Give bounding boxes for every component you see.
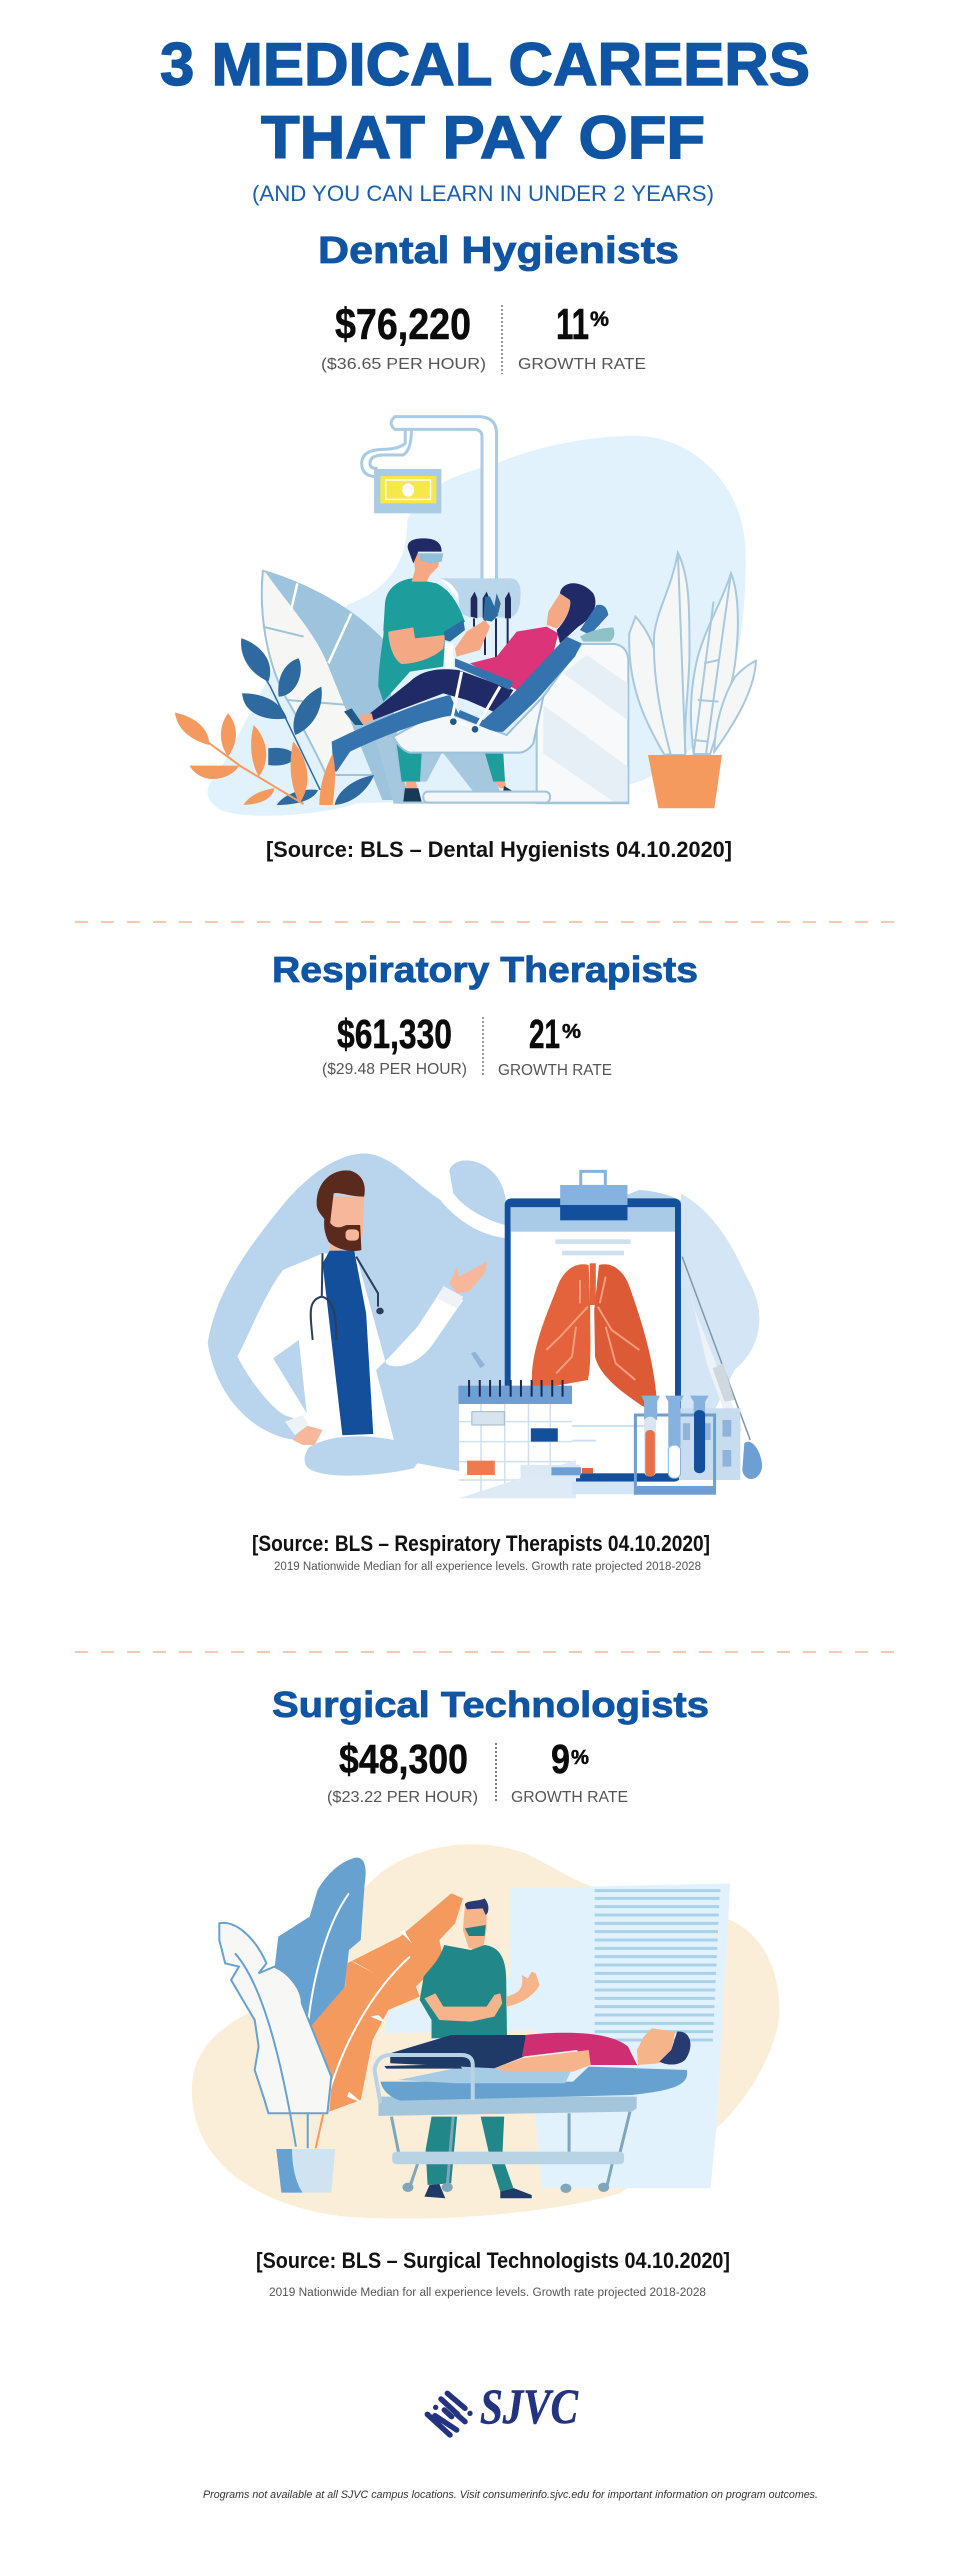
- growth: dental: [518, 300, 646, 373]
- growth: dental: %: [590, 308, 609, 331]
- pill: [471, 1352, 485, 1368]
- white strip: [445, 643, 453, 668]
- background blob: [192, 1844, 779, 2219]
- title: 3 MEDICAL CAREERS: [160, 31, 810, 98]
- base plate: [393, 792, 628, 803]
- patient face and hair: [547, 583, 595, 643]
- coat: [237, 1253, 463, 1452]
- lamp monitor: [374, 469, 441, 513]
- dental scene: [332, 538, 628, 803]
- illustration: surgical technologist with patient: [192, 1844, 779, 2219]
- right side blob tint: [679, 1193, 759, 1450]
- stethoscope: [311, 1253, 383, 1340]
- patient: [390, 2028, 690, 2072]
- source: surgical: [Source: BLS – Surgical Technologists 04.10.2020]: [256, 2248, 730, 2273]
- source: respiratory: [Source: BLS – Respiratory Therapists 04.10.2020]: [252, 1531, 710, 1556]
- patient legs: [370, 669, 513, 720]
- logo: SJVC: SJVC: [480, 2378, 579, 2434]
- dentist head: [408, 538, 443, 582]
- title: [160, 31, 810, 171]
- dentist arm: [388, 627, 445, 664]
- background blob: [208, 436, 746, 816]
- dentist feet: [403, 782, 512, 802]
- dentist forearm and gloves: [444, 597, 498, 657]
- flower pot: [648, 755, 722, 808]
- patient foot: [344, 708, 373, 725]
- subtitle: (AND YOU CAN LEARN IN UNDER 2 YEARS): [252, 181, 714, 206]
- heading: dental hygienists: Dental Hygienists: [318, 230, 679, 272]
- salary: surgical: ($23.22 PER HOUR): [327, 1789, 478, 1806]
- salary: respiratory: [322, 1011, 467, 1078]
- salary: dental: $76,220: [335, 300, 471, 349]
- thermometer: [682, 1257, 762, 1479]
- illustration: respiratory therapist with lungs: [208, 1153, 762, 1498]
- disclaimer: Programs not available at all SJVC campus locations. Visit consumerinfo.sjvc.edu for important information on program outcomes.: [203, 2489, 818, 2501]
- heading: respiratory therapists: Respiratory Therapists: [272, 949, 698, 990]
- source: dental: [Source: BLS – Dental Hygienists 04.10.2020]: [266, 837, 732, 862]
- growth: surgical: 9: [551, 1736, 570, 1782]
- blue leaf: [259, 1858, 366, 2050]
- footnote: respiratory: 2019 Nationwide Median for all experience levels. Growth rate projected 2018-2028: [274, 1561, 701, 1573]
- clipboard: [505, 1171, 681, 1482]
- footnote: surgical: 2019 Nationwide Median for all experience levels. Growth rate projected 2018-2028: [269, 2287, 706, 2299]
- head: [317, 1170, 365, 1251]
- upper blob: [449, 1160, 513, 1227]
- orange leaves branch: [175, 713, 335, 805]
- white gap: [441, 1193, 509, 1238]
- growth: surgical: GROWTH RATE: [511, 1789, 628, 1806]
- tool holder: [440, 578, 521, 660]
- dentist pants: [397, 743, 505, 782]
- clipboard bottom extension: [572, 1482, 635, 1494]
- background blob: [208, 1153, 759, 1493]
- chair pillars: [375, 737, 500, 802]
- growth: respiratory: %: [562, 1021, 581, 1043]
- gurney rail: [375, 2055, 473, 2103]
- foreground plants: [175, 553, 756, 808]
- heading: surgical technologists: Surgical Technologists: [272, 1684, 709, 1725]
- salary: dental: ($36.65 PER HOUR): [321, 356, 486, 373]
- plant pot: [276, 2149, 335, 2193]
- calendar: [458, 1380, 593, 1498]
- test tube rack: [635, 1396, 740, 1494]
- growth: surgical: [511, 1736, 628, 1806]
- lungs: [532, 1263, 657, 1407]
- dentist torso: [378, 578, 465, 702]
- potted plant: [629, 553, 756, 755]
- cuff: [285, 1286, 463, 1435]
- cabinet: [537, 644, 628, 803]
- window panel: [384, 1883, 730, 2188]
- orange leaf: [308, 1893, 463, 2113]
- arm gap: [273, 1340, 307, 1413]
- blue leaves branch: [241, 638, 374, 805]
- growth: dental: GROWTH RATE: [518, 356, 646, 373]
- title: THAT PAY OFF: [261, 104, 705, 171]
- background and lamp: [208, 417, 746, 816]
- salary: surgical: $48,300: [339, 1736, 468, 1782]
- salary: respiratory: ($29.48 PER HOUR): [322, 1061, 467, 1078]
- gurney: [378, 2067, 687, 2193]
- chair base: [393, 697, 543, 753]
- white leaf: [219, 1923, 331, 2148]
- salary: respiratory: $61,330: [337, 1011, 452, 1057]
- growth: respiratory: 21: [529, 1011, 560, 1057]
- growth: respiratory: [498, 1011, 612, 1079]
- technologist body: [420, 1898, 540, 2198]
- dental lamp arm: [362, 417, 497, 580]
- salary: surgical: [327, 1736, 478, 1806]
- window blinds: [595, 1891, 720, 2040]
- illustration: dental hygienist with patient: [175, 417, 756, 816]
- patient top: [470, 627, 558, 690]
- growth: dental: 11: [556, 300, 589, 349]
- growth: surgical: %: [571, 1747, 589, 1769]
- hands: [293, 1262, 487, 1445]
- dental chair: [332, 605, 614, 772]
- sheet lines: [572, 1426, 655, 1441]
- shirt: [323, 1251, 373, 1435]
- large leaf: [262, 571, 407, 800]
- growth: respiratory: GROWTH RATE: [498, 1062, 612, 1079]
- salary: dental: [321, 300, 486, 373]
- logo: SJVC: [427, 2378, 579, 2435]
